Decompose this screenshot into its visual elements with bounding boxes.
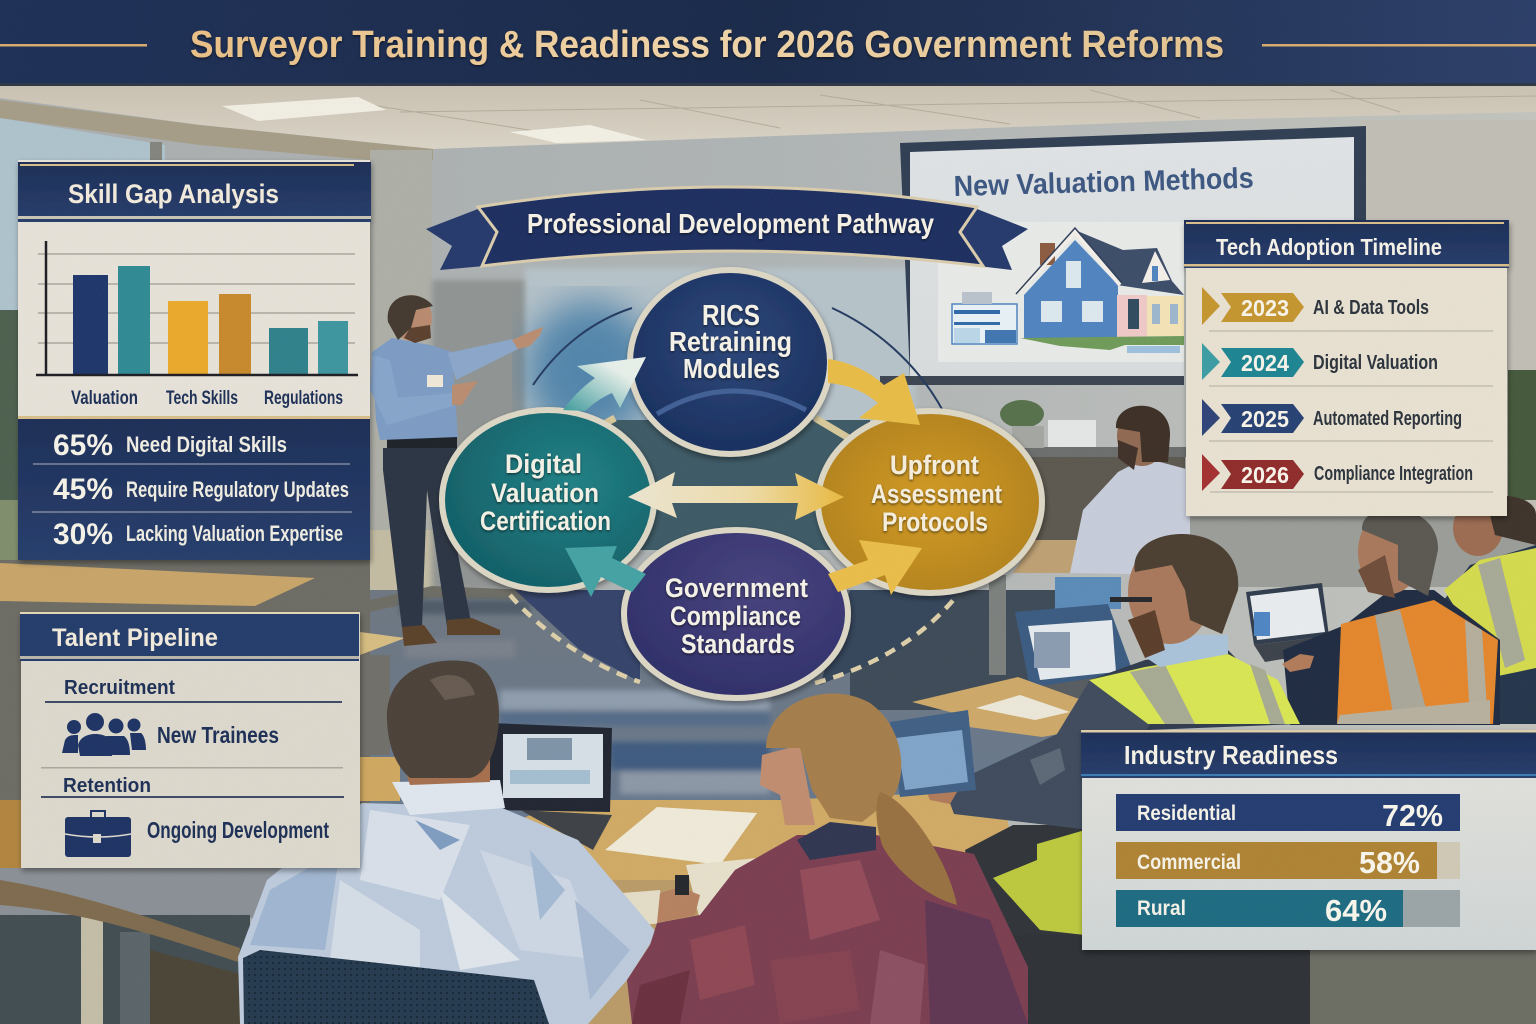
readiness header: [1081, 730, 1536, 778]
banner ribbon: [478, 187, 983, 266]
lower hi-vis vest: [993, 830, 1085, 935]
desk front: [580, 880, 700, 1024]
shirt: [372, 338, 458, 440]
centre fill: [600, 420, 870, 550]
timeline row 2025: Automated Reporting: [1313, 408, 1462, 430]
window: [0, 100, 433, 560]
laptop: hi-vis surveyor: [1015, 604, 1150, 706]
node: Upfront Assessment Protocols: Upfront: [890, 450, 979, 480]
recruitment section: [45, 677, 342, 756]
plant: [1000, 400, 1044, 428]
node: Upfront Assessment Protocols: Assessment: [871, 479, 1002, 509]
node: RICS Retraining Modules: Retraining: [669, 326, 792, 357]
bar: Residential: 72%: [1382, 798, 1443, 833]
left lower room: [0, 560, 370, 890]
arrow: retraining to assessment: [828, 359, 920, 425]
title: Surveyor Training & Readiness for 2026 Government Reforms: [190, 24, 1224, 66]
title banner: [0, 0, 1536, 86]
laptop: centre front: [490, 723, 612, 850]
node: Government Compliance Standards: Government: [665, 573, 808, 603]
bar: Rural: [1116, 890, 1460, 928]
indigo floor under ring: [515, 590, 640, 682]
timeline row 2024: [1202, 343, 1438, 380]
folded arm: [370, 355, 453, 425]
belt: [387, 437, 457, 448]
phone: [675, 875, 689, 895]
connecting ring right: [815, 418, 852, 440]
skill gap statistics: 65%: [53, 429, 113, 462]
skill gap statistics: Require Regulatory Updates: [126, 477, 349, 502]
person: rear seated colleague: [1070, 406, 1190, 575]
retention section: Retention: [63, 775, 151, 797]
second hand: [452, 381, 478, 405]
brown under desk: [150, 950, 245, 1024]
pale wall behind diagram: [525, 268, 915, 433]
paper on side desk: [976, 695, 1070, 720]
person: orange vest surveyor: [1282, 509, 1500, 725]
timeline header: Tech Adoption Timeline: [1216, 234, 1442, 260]
hand on laptop: [922, 770, 961, 804]
retention section: [41, 775, 344, 857]
right wall outside: [1360, 120, 1536, 540]
collar: [797, 822, 876, 860]
ceiling light left: [222, 97, 386, 121]
icon: briefcase: [65, 811, 131, 857]
bar chart: [36, 241, 358, 409]
skill gap statistics: [18, 416, 370, 560]
panel: Skill Gap Analysis: [18, 160, 371, 560]
right tail: [960, 209, 1028, 270]
projector board: New Valuation Methods: [880, 126, 1366, 385]
node: Government Compliance Standards: Standards: [681, 629, 795, 659]
dashed ring left: [510, 595, 640, 682]
timeline row 2023: [1202, 287, 1429, 325]
ponytail: [876, 792, 957, 905]
boots: [402, 618, 500, 646]
lower centre desk: [500, 790, 1013, 885]
pot: [1012, 426, 1044, 448]
icon: group of trainees: [62, 713, 146, 756]
timeline header: [1184, 220, 1509, 268]
timeline row 2023: 2023: [1241, 295, 1289, 321]
shadow below hi-vis surveyor: [965, 825, 1090, 1024]
badge: [427, 375, 443, 387]
node: Upfront Assessment Protocols: [818, 411, 1042, 593]
panel: Tech Adoption Timeline: [1184, 220, 1509, 516]
side wall: [370, 150, 432, 530]
face: [760, 745, 815, 825]
person: woman with ponytail: [627, 693, 1028, 1024]
monitor behind hi-vis surveyor: [1055, 577, 1121, 609]
skill gap statistics: 45%: [53, 473, 113, 506]
node: Digital Valuation Certification: [442, 410, 654, 590]
bar: Rural: 64%: [1325, 893, 1387, 928]
panel: Talent Pipeline: [20, 612, 360, 868]
small sign: [1048, 420, 1096, 447]
left tail: [426, 209, 497, 270]
lower left dark base: [0, 915, 250, 1024]
floor: [370, 590, 1090, 820]
timeline row 2025: [1202, 399, 1462, 436]
pointing arm: [448, 339, 518, 380]
bottom right dark area: [990, 935, 1310, 1024]
lower left haze: [0, 868, 300, 918]
top patches: [800, 860, 880, 940]
timeline row 2024: 2024: [1241, 350, 1289, 376]
chair back: [243, 950, 549, 1024]
skill gap statistics: Lacking Valuation Expertise: [126, 521, 343, 546]
hair: [387, 660, 499, 778]
bottom right floor: [1310, 950, 1536, 1024]
vest: [1089, 654, 1300, 724]
pipeline header: [20, 612, 359, 661]
connecting ring left: [575, 418, 615, 440]
left table: [0, 563, 315, 606]
node: Digital Valuation Certification: Certification: [480, 506, 611, 536]
hair: [766, 693, 901, 822]
panel header: Skill Gap Analysis: [68, 179, 279, 209]
recruitment section: Recruitment: [64, 677, 175, 699]
trousers: [383, 448, 472, 628]
icon: house illustration: [1016, 228, 1184, 353]
retention section: Ongoing Development: [147, 817, 329, 843]
node: Government Compliance Standards: Compliance: [670, 601, 801, 631]
sleeve highlights: [1030, 748, 1065, 785]
hand with phone: [657, 887, 700, 923]
person: man in patterned shirt: [238, 660, 657, 1024]
timeline row 2026: Compliance Integration: [1314, 463, 1473, 485]
board heading: New Valuation Methods: [953, 163, 1254, 203]
bar: Commercial: 58%: [1359, 845, 1420, 880]
shirt patches: [392, 780, 505, 815]
banner text: Professional Development Pathway: [527, 208, 934, 239]
node: RICS Retraining Modules: [630, 270, 830, 454]
skill gap statistics: 30%: [53, 518, 113, 551]
skill gap statistics: Need Digital Skills: [126, 432, 287, 457]
watercolour haze: [525, 300, 655, 440]
banner: [426, 187, 1028, 270]
node: Digital Valuation Certification: Digital: [505, 449, 582, 479]
recruitment section: New Trainees: [157, 722, 279, 748]
pipeline header: Talent Pipeline: [52, 624, 218, 652]
timeline row 2024: Digital Valuation: [1313, 352, 1438, 374]
bar: Residential: Residential: [1137, 802, 1236, 825]
desk leg light: [81, 917, 103, 1024]
person: hi-vis surveyor with glasses: [922, 534, 1300, 935]
floor streaks: [400, 600, 770, 794]
timeline row 2026: 2026: [1241, 462, 1289, 488]
laptop: orange vest surveyor: [1246, 583, 1329, 662]
diagram: Professional Development Pathway: [426, 187, 1042, 698]
ceiling light right: [510, 125, 647, 143]
pointing hand: [512, 327, 543, 349]
readiness header: Industry Readiness: [1124, 740, 1338, 770]
jacket sleeve: [944, 680, 1150, 830]
dashed ring right: [815, 598, 955, 683]
node: RICS Retraining Modules: Modules: [683, 353, 780, 384]
panel: Industry Readiness: [1081, 730, 1536, 950]
bar chart: Regulations: [264, 388, 343, 409]
glasses: [1110, 597, 1152, 602]
dark office furniture: [850, 590, 1090, 710]
panel header: [18, 162, 371, 222]
floor plan illustration: [952, 292, 1017, 344]
bar chart: Tech Skills: [166, 388, 238, 409]
node: Upfront Assessment Protocols: Protocols: [882, 507, 988, 537]
timeline row 2026: [1202, 454, 1473, 491]
bar: Residential: [1116, 794, 1460, 833]
person: presenter: [370, 295, 543, 646]
arrow: certification to retraining: [563, 357, 646, 411]
laptop: side: [890, 710, 976, 797]
small table: [360, 632, 405, 655]
ceiling: [0, 85, 1536, 149]
timeline row 2023: AI & Data Tools: [1313, 297, 1429, 319]
arrow: compliance to certification: [565, 546, 646, 597]
desk leg grey: [120, 932, 150, 1024]
hair highlight: [430, 675, 475, 700]
bar: Commercial: [1116, 842, 1460, 880]
node: RICS Retraining Modules: RICS: [702, 300, 760, 332]
node: Government Compliance Standards: [624, 530, 848, 698]
rear office shelf: [960, 400, 1190, 573]
book and paperwork on desk: [605, 807, 768, 925]
arrow: two-way certification and assessment: [628, 472, 844, 520]
side desk: [912, 677, 1082, 737]
person: far right hi-vis surveyor: [1444, 496, 1536, 724]
timeline row 2025: 2025: [1241, 406, 1289, 432]
curved desk edge: [0, 880, 240, 962]
arrow: compliance to assessment: [828, 540, 922, 595]
bar: Rural: Rural: [1137, 897, 1186, 920]
dark floor under ring right: [820, 590, 960, 685]
neck: [400, 755, 490, 785]
rear wall: [432, 280, 532, 590]
large pathway ring top: [533, 308, 950, 425]
hand on laptop: [1282, 654, 1314, 672]
node: Digital Valuation Certification: Valuation: [491, 478, 599, 508]
bar chart: Valuation: [71, 388, 138, 409]
bar: Commercial: Commercial: [1137, 851, 1241, 874]
head: [392, 295, 432, 341]
